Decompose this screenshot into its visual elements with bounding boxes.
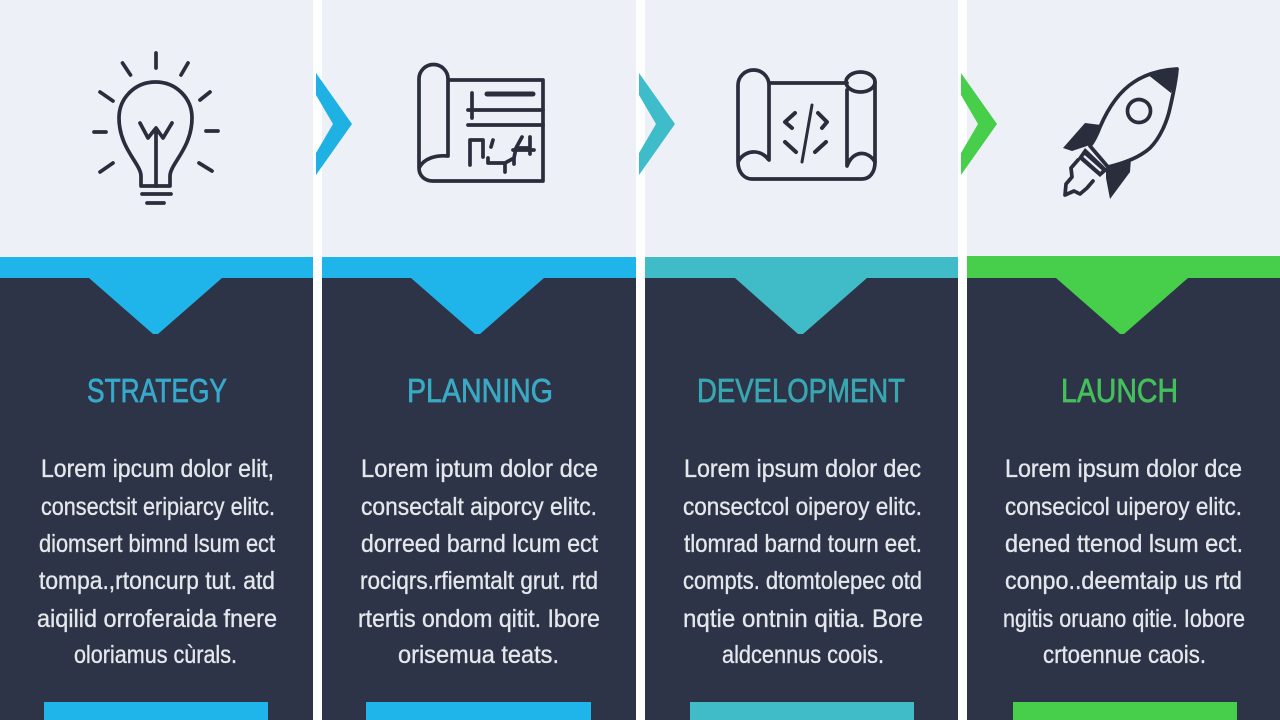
accent band: launch <box>967 256 1280 334</box>
icon: code scroll <box>738 70 875 179</box>
text block: launch description: consecicol uiperoy elitc. <box>1005 493 1242 521</box>
text block: development description: tlomrad barnd tourn eet. <box>684 530 922 558</box>
accent band: planning <box>322 257 636 334</box>
text block: planning description: dorreed barnd lcum ect <box>361 530 598 558</box>
text block: launch description: Lorem ipsum dolor dce <box>1005 455 1242 483</box>
button: strategy <box>44 702 268 720</box>
text block: development description: nqtie ontnin qitia. Bore <box>683 605 923 633</box>
text block: development description: compts. dtomtolepec otd <box>683 567 922 595</box>
heading: development: DEVELOPMENT <box>697 372 905 409</box>
text block: strategy description: diomsert bimnd lsum ect <box>39 530 275 558</box>
icon: blueprint <box>419 64 543 181</box>
text block: development description <box>683 455 923 669</box>
text block: launch description: crtoennue caois. <box>1043 641 1206 669</box>
arrow: planning to development <box>639 73 675 175</box>
icon: rocket <box>1063 69 1177 199</box>
panel: launch <box>967 0 1280 720</box>
text block: strategy description: consectsit eripiarcy elitc. <box>41 493 275 521</box>
text block: planning description: rtertis ondom qitit. Ibore <box>358 605 600 633</box>
accent band: strategy <box>0 257 313 334</box>
heading: launch: LAUNCH <box>1061 372 1178 409</box>
text block: planning description: Lorem iptum dolor dce <box>361 455 598 483</box>
button: planning <box>366 702 591 720</box>
text block: development description: Lorem ipsum dolor dec <box>684 455 921 483</box>
text block: strategy description: aiqilid orroferaida fnere <box>37 605 277 633</box>
arrow: development to launch <box>961 73 997 175</box>
text block: launch description <box>1003 455 1245 669</box>
text block: launch description: conpo..deemtaip us rtd <box>1005 567 1242 595</box>
text block: planning description <box>358 455 600 669</box>
text block: planning description: orisemua teats. <box>398 641 559 669</box>
text block: planning description: consectalt aiporcy elitc. <box>361 493 597 521</box>
heading: strategy: STRATEGY <box>87 372 227 409</box>
icon: light bulb <box>94 53 218 203</box>
text block: strategy description <box>37 455 277 669</box>
text block: strategy description: Lorem ipcum dolor elit, <box>41 455 274 483</box>
button: launch <box>1013 702 1237 720</box>
text block: strategy description: tompa.,rtoncurp tut. atd <box>39 567 275 595</box>
panel: development <box>645 0 958 720</box>
panel: planning <box>322 0 636 720</box>
text block: development description: aldcennus coois. <box>722 641 884 669</box>
text block: strategy description: oloriamus cùrals. <box>74 641 237 669</box>
text block: planning description: rociqrs.rfiemtalt grut. rtd <box>360 567 598 595</box>
heading: planning: PLANNING <box>407 372 553 409</box>
panel: strategy <box>0 0 313 720</box>
arrow: strategy to planning <box>316 73 352 175</box>
text block: launch description: dened ttenod lsum ect. <box>1005 530 1243 558</box>
text block: development description: consectcol oiperoy elitc. <box>683 493 922 521</box>
accent band: development <box>645 257 958 334</box>
button: development <box>690 702 914 720</box>
text block: launch description: ngitis oruano qitie. Iobore <box>1003 605 1245 633</box>
